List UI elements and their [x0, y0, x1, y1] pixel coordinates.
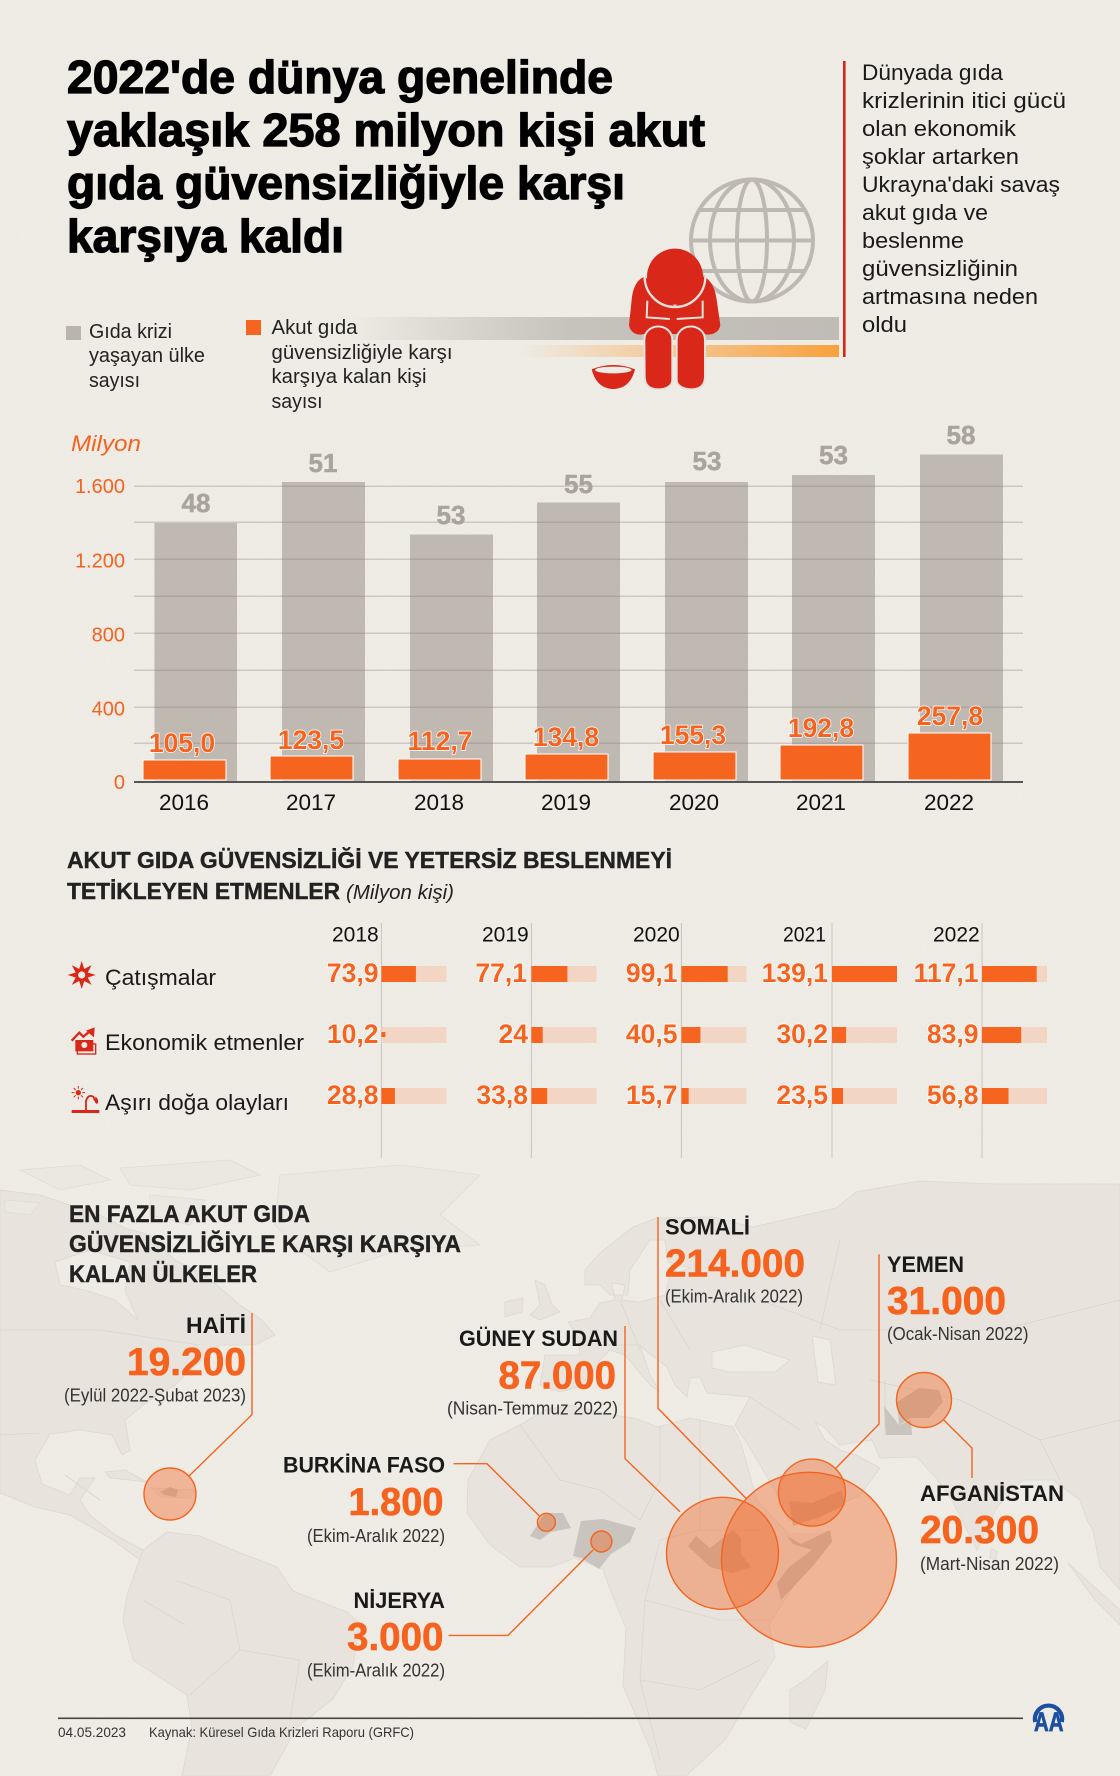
row: economic factors: 24: [499, 1019, 528, 1049]
Burkina Faso: [530, 1513, 571, 1540]
callout: Haiti: [64, 1313, 246, 1406]
callout: Somalia: 214.000: [665, 1242, 805, 1286]
callout: Haiti: (Eylül 2022-Şubat 2023): [64, 1386, 246, 1406]
date: 04.05.2023: [58, 1724, 126, 1740]
source: Kaynak: Küresel Gıda Krizleri Raporu (GRFC): [149, 1724, 414, 1740]
x axis years: 2018: [414, 790, 464, 815]
row: conflicts: Çatışmalar: [105, 965, 217, 990]
United Kingdom and Ireland: [505, 1280, 560, 1320]
heading: drivers: [67, 846, 672, 904]
gray bar values: 51: [309, 448, 337, 478]
row: economic factors: [72, 1019, 1047, 1055]
Africa: [467, 1405, 828, 1776]
legend item: countries in food crisis: sayısı: [89, 370, 140, 392]
x axis years: 2019: [541, 790, 591, 815]
bubble: South Sudan: [666, 1497, 778, 1609]
callout: Afghanistan: [920, 1481, 1064, 1574]
x axis years: 2017: [286, 790, 336, 815]
North America: [0, 1190, 275, 1560]
logo: AA: AA: [1034, 1707, 1064, 1737]
Arctic islands: [5, 1160, 260, 1225]
icon: explosion: [68, 961, 96, 989]
legend item: people facing acute food insecurity: [246, 317, 452, 413]
intro text block: şoklar artarken: [862, 144, 1019, 169]
row: extreme weather: 28,8: [327, 1080, 378, 1110]
unit label: Milyon: [71, 431, 141, 456]
x axis years: [159, 790, 974, 815]
row: conflicts: [68, 958, 1047, 990]
column rules: [381, 923, 982, 1158]
gray bars: countries: [154, 454, 1003, 781]
callout: Nigeria: [307, 1588, 445, 1680]
world map: [0, 1160, 1120, 1776]
orange bar values: 105,0: [149, 728, 215, 758]
y axis labels: 400: [92, 698, 125, 720]
country borders: [0, 1240, 1120, 1760]
callout: South Sudan: GÜNEY SUDAN: [459, 1326, 618, 1351]
orange bar values: 192,8: [788, 713, 854, 743]
title: gıda güvensizliğiyle karşı: [67, 157, 625, 209]
callout: Haiti: 19.200: [127, 1341, 246, 1384]
legend item: people facing acute food insecurity: güvensizliğiyle karşı: [272, 342, 452, 364]
heading: drivers: TETİKLEYEN ETMENLER: [67, 878, 340, 904]
callout: South Sudan: (Nisan-Temmuz 2022): [447, 1398, 618, 1418]
bubble: Yemen: [778, 1459, 846, 1526]
year headers: [332, 924, 980, 946]
callout: Afghanistan: (Mart-Nisan 2022): [920, 1554, 1059, 1574]
table: drivers by year: [68, 923, 1047, 1158]
title: karşıya kaldı: [67, 210, 344, 262]
callout: Yemen: (Ocak-Nisan 2022): [887, 1324, 1028, 1344]
heading: drivers: (Milyon kişi): [346, 882, 454, 904]
grid lines: [134, 486, 1023, 743]
callout: Yemen: 31.000: [887, 1280, 1006, 1323]
row: economic factors: 10,2: [327, 1019, 378, 1049]
gray bar values: 58: [947, 420, 975, 450]
callout: Somalia: SOMALİ: [665, 1214, 750, 1240]
row: economic factors: Ekonomik etmenler: [105, 1030, 305, 1055]
baseline: [134, 781, 1023, 783]
intro text block: Ukrayna'daki savaş: [862, 172, 1060, 197]
callout: Haiti: HAİTİ: [186, 1313, 246, 1338]
Greenland: [275, 1165, 480, 1272]
intro text block: akut gıda ve: [862, 200, 988, 225]
South Sudan: [688, 1530, 751, 1573]
row: conflicts: 73,9: [327, 958, 378, 988]
orange bars: people: [143, 733, 991, 780]
callout: Nigeria: 3.000: [347, 1616, 444, 1659]
y axis labels: 1.200: [75, 550, 125, 572]
orange bar values: 112,7: [408, 726, 472, 756]
intro text block: krizlerinin itici gücü: [862, 88, 1066, 113]
callout: Burkina Faso: 1.800: [348, 1481, 444, 1524]
intro text block: Dünyada gıda: [862, 60, 1003, 85]
legend item: people facing acute food insecurity: sayısı: [272, 391, 322, 413]
x axis years: 2016: [159, 790, 209, 815]
intro text block: [862, 60, 1066, 337]
icon: seated person: [629, 249, 720, 389]
intro text block: olan ekonomik: [862, 116, 1017, 141]
legend item: countries in food crisis: yaşayan ülke: [89, 345, 205, 367]
Somalia: [777, 1530, 832, 1600]
Yemen: [789, 1490, 845, 1526]
orange band: [520, 345, 839, 357]
heading: countries: GÜVENSİZLİĞİYLE KARŞI KARŞIYA: [69, 1230, 461, 1258]
x axis years: 2022: [924, 790, 974, 815]
x axis years: 2020: [669, 790, 719, 815]
row: economic factors: 30,2: [776, 1019, 828, 1049]
row: extreme weather: 23,5: [776, 1080, 828, 1110]
orange bar values: 155,3: [660, 720, 726, 750]
row: extreme weather: Aşırı doğa olayları: [105, 1090, 289, 1115]
gray bar values: [182, 420, 975, 530]
legend item: countries in food crisis: Gıda krizi: [89, 321, 172, 343]
year headers: 2020: [633, 924, 680, 946]
orange bar values: [149, 701, 983, 758]
row: extreme weather: 56,8: [927, 1080, 978, 1110]
gray bar values: 48: [182, 488, 210, 518]
bubble: Somalia: [722, 1472, 896, 1647]
legend item: people facing acute food insecurity: Akut gıda: [272, 317, 358, 339]
bubble: Nigeria: [591, 1531, 612, 1552]
legend item: countries in food crisis: [66, 321, 205, 392]
Madagascar: [790, 1661, 828, 1729]
year headers: 2021: [783, 924, 826, 946]
x axis years: 2021: [796, 790, 846, 815]
gray bar values: 53: [819, 440, 848, 470]
y axis labels: 0: [114, 772, 125, 794]
orange bar values: 134,8: [533, 722, 599, 752]
callout: South Sudan: [447, 1326, 618, 1418]
y axis labels: [75, 476, 125, 794]
legend: [66, 317, 452, 413]
icon: economy: [72, 1027, 96, 1054]
callout: Burkina Faso: [283, 1452, 445, 1546]
illustration: globe, person and bands: [350, 61, 846, 389]
callout: Yemen: [887, 1252, 1028, 1344]
row: conflicts: 117,1: [914, 958, 978, 988]
bubble: Afghanistan: [896, 1372, 952, 1428]
year headers: 2018: [332, 924, 379, 946]
row: extreme weather: [72, 1080, 1047, 1115]
callout: Nigeria: (Ekim-Aralık 2022): [307, 1660, 445, 1680]
heading: countries: [69, 1201, 461, 1288]
Afghanistan: [897, 1388, 943, 1425]
South America: [123, 1532, 360, 1776]
callout: Afghanistan: AFGANİSTAN: [920, 1481, 1064, 1506]
callout: Nigeria: NİJERYA: [354, 1588, 445, 1613]
year headers: 2022: [933, 924, 980, 946]
icon: extreme weather: [72, 1086, 99, 1113]
bubble: Burkina Faso: [537, 1513, 555, 1531]
gray bar values: 53: [437, 500, 465, 530]
red vertical rule: [843, 61, 846, 357]
y axis labels: 800: [92, 624, 125, 646]
row: extreme weather: 33,8: [476, 1080, 528, 1110]
callout: Afghanistan: 20.300: [920, 1509, 1039, 1552]
intro text block: beslenme: [862, 228, 964, 253]
intro text block: oldu: [862, 312, 907, 337]
icon: bowl: [592, 365, 635, 389]
row: conflicts: 77,1: [475, 958, 527, 988]
bar chart: [71, 420, 1023, 815]
callout: Somalia: (Ekim-Aralık 2022): [665, 1286, 803, 1306]
callout: Burkina Faso: (Ekim-Aralık 2022): [307, 1526, 445, 1546]
Pakistan part: [884, 1406, 912, 1435]
y axis labels: 1.600: [75, 476, 125, 498]
Sumatra and Sri Lanka: [990, 1548, 1120, 1625]
icon: globe: [691, 180, 813, 302]
row: economic factors: 83,9: [927, 1019, 978, 1049]
row: conflicts: 139,1: [762, 958, 828, 988]
heading: countries: KALAN ÜLKELER: [69, 1261, 257, 1288]
gray band: [350, 317, 839, 340]
orange bar values: 123,5: [278, 725, 344, 755]
leader lines: [189, 1217, 972, 1635]
gray bar values: 55: [564, 469, 593, 499]
callout: Burkina Faso: BURKİNA FASO: [283, 1452, 445, 1478]
callout: Somalia: [665, 1214, 805, 1306]
callout: South Sudan: 87.000: [498, 1354, 616, 1398]
Haiti: [160, 1487, 178, 1497]
row: extreme weather: 15,7: [626, 1080, 678, 1110]
highlighted countries: [160, 1388, 943, 1600]
row: economic factors: 40,5: [626, 1019, 678, 1049]
callout: Yemen: YEMEN: [887, 1252, 964, 1277]
gray bar values: 53: [693, 446, 721, 476]
orange bar values: 257,8: [917, 701, 983, 731]
heading: countries: EN FAZLA AKUT GIDA: [69, 1201, 310, 1228]
bubbles and leader lines: [144, 1217, 972, 1647]
row: conflicts: 99,1: [626, 958, 678, 988]
Eurasia: [540, 1181, 1120, 1590]
intro text block: artmasına neden: [862, 284, 1038, 309]
title: 2022'de dünya genelinde: [67, 51, 613, 103]
title: yaklaşık 258 milyon kişi akut: [67, 104, 705, 156]
legend item: people facing acute food insecurity: karşıya kalan kişi: [272, 366, 426, 388]
Caribbean islands: [105, 1470, 195, 1498]
heading: drivers: AKUT GIDA GÜVENSİZLİĞİ VE YETERSİZ BESLENMEYİ: [67, 846, 672, 873]
title: [67, 51, 705, 262]
intro text block: güvensizliğinin: [862, 256, 1018, 281]
bubble: Haiti: [144, 1468, 196, 1520]
footer: [58, 1706, 1064, 1740]
Nigeria: [573, 1519, 636, 1569]
year headers: 2019: [482, 924, 529, 946]
